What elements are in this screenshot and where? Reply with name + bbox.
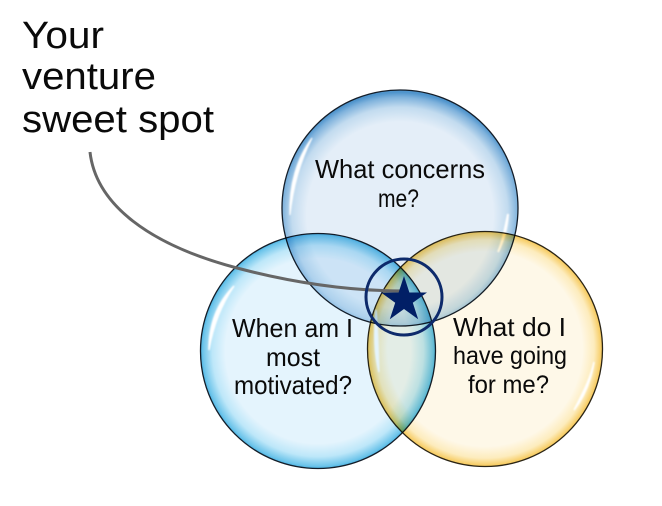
label: what do I have going for me: [453, 312, 567, 399]
label: what do I have going for me: have going: [453, 342, 567, 370]
heading: your venture sweet spot: [22, 15, 214, 141]
label: what do I have going for me: for me?: [468, 371, 549, 399]
heading: your venture sweet spot: sweet spot: [22, 99, 214, 141]
label: when am I most motivated: most: [266, 342, 321, 372]
label: what concerns me: What concerns: [315, 154, 485, 184]
icon: star: [381, 276, 427, 319]
heading: your venture sweet spot: venture: [22, 56, 156, 98]
label: when am I most motivated: [232, 313, 353, 400]
label: what concerns me: [315, 154, 485, 213]
arrow: curved leader line to sweet spot: [90, 152, 405, 291]
ring: sweet spot highlight: [366, 259, 442, 335]
label: when am I most motivated: motivated?: [234, 370, 352, 400]
label: when am I most motivated: When am I: [232, 313, 353, 343]
heading: your venture sweet spot: Your: [22, 15, 104, 57]
label: what concerns me: me?: [378, 185, 419, 213]
circle: when am I most motivated: [200, 234, 436, 468]
label: what do I have going for me: What do I: [453, 312, 566, 342]
circle: what concerns me: [282, 90, 518, 326]
circle: what do I have going for me: [368, 232, 602, 466]
